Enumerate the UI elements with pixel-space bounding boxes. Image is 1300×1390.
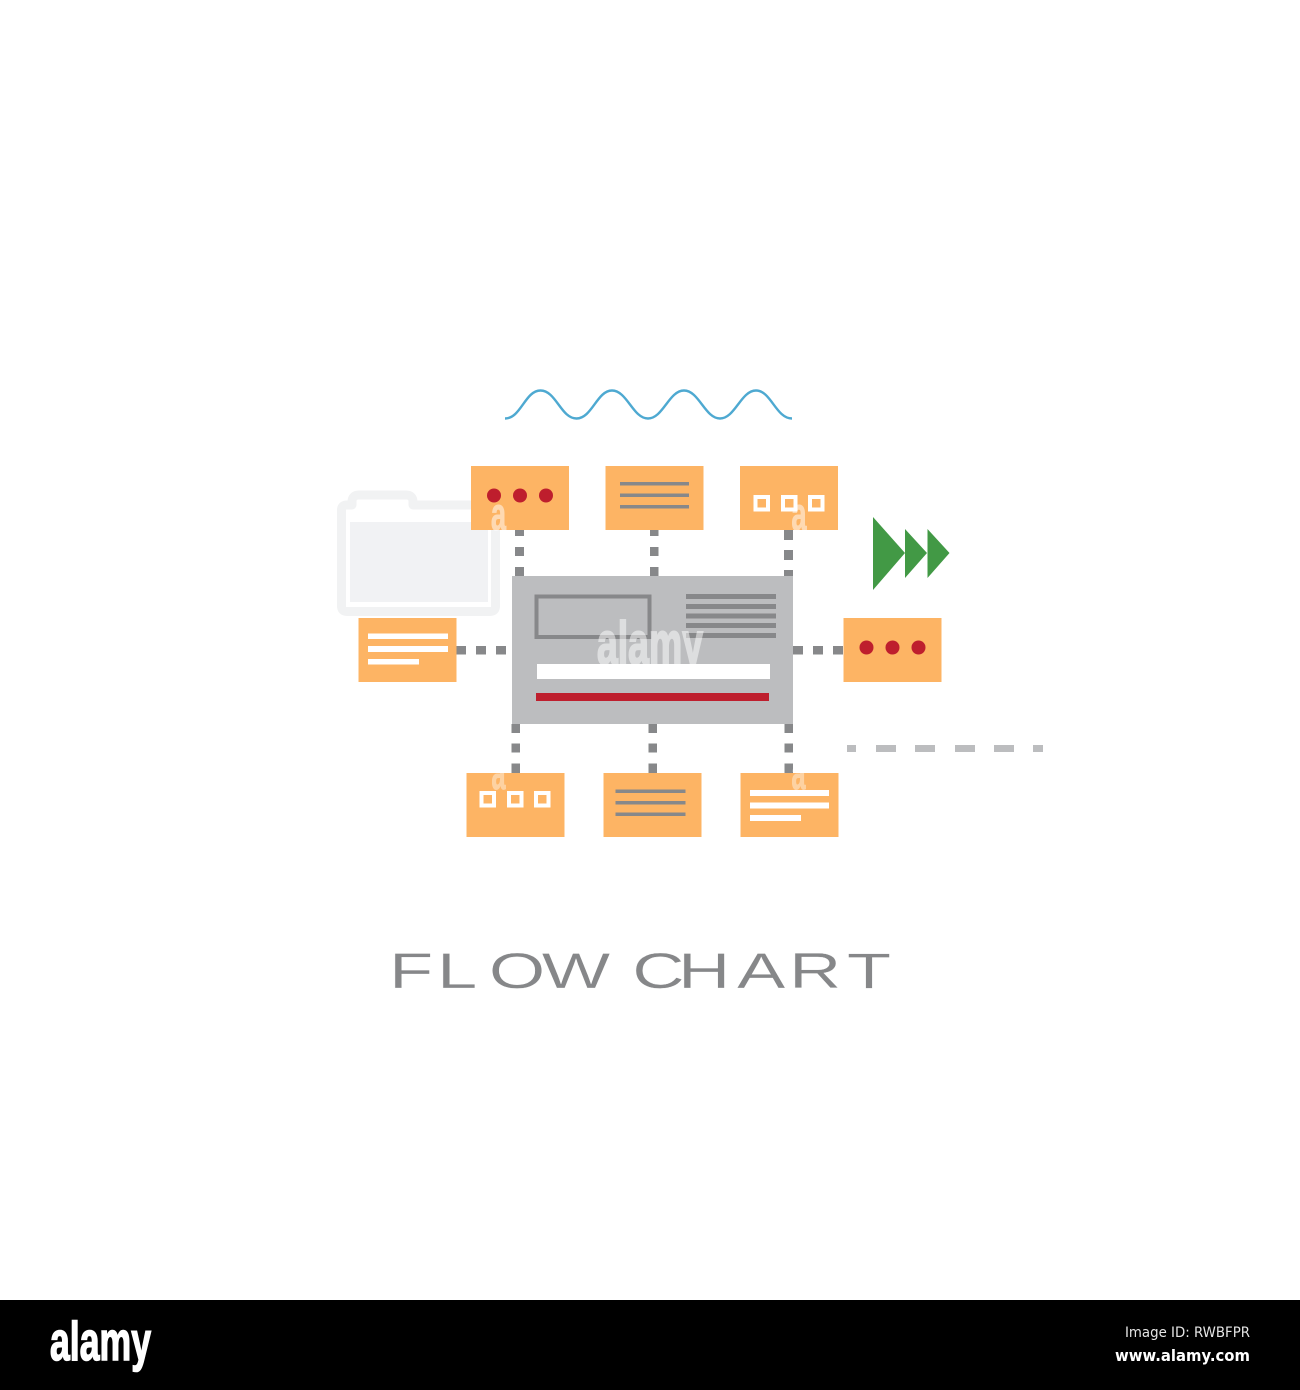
- watermark: alamy marks over the artwork: a: [491, 488, 506, 540]
- box: left with white lines: [358, 618, 456, 682]
- box: top middle with grey lines: [606, 466, 704, 530]
- box: top right with squares: [740, 466, 838, 530]
- watermark: alamy marks over the artwork: a: [492, 747, 506, 799]
- box: bottom right with white lines: [740, 773, 838, 837]
- title: FLOW CHART: [389, 944, 891, 999]
- box: bottom left with squares: [466, 773, 564, 837]
- box: top left with red dots: [471, 466, 569, 530]
- box: bottom middle with grey lines: [604, 773, 702, 837]
- icon: folder: [342, 495, 496, 612]
- watermark: alamy marks over the artwork: [491, 488, 807, 799]
- icon: green triple arrow: [873, 517, 950, 590]
- box: right with red dots: [844, 618, 942, 682]
- watermark: alamy marks over the artwork: alamy: [597, 610, 703, 677]
- watermark: alamy marks over the artwork: a: [792, 747, 806, 799]
- website: www.alamy.com: [1115, 1346, 1250, 1365]
- footer logo: alamy: [50, 1310, 151, 1372]
- connectors: dotted lines from main panel to boxes: [456, 530, 843, 773]
- grey dashed line: [847, 745, 1043, 752]
- footer bar: [0, 1300, 1300, 1390]
- watermark: alamy marks over the artwork: a: [792, 488, 807, 540]
- panel: main central card: [512, 576, 793, 724]
- image id: Image ID: RWBFPR: [1125, 1325, 1250, 1341]
- icon: wave line: [505, 390, 792, 418]
